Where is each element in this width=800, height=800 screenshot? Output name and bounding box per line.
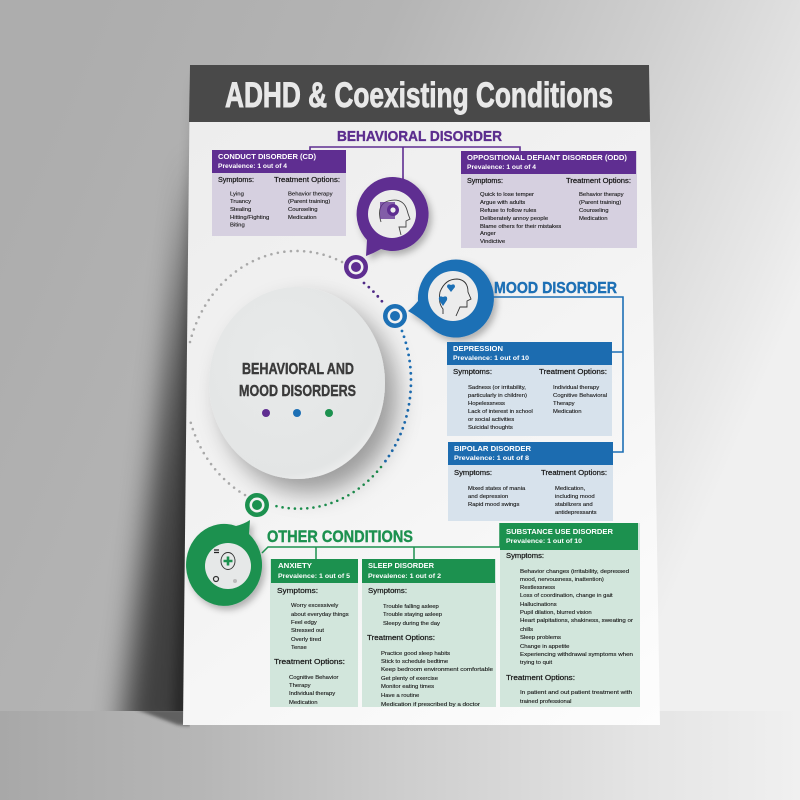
panel: anxiety: Symptoms: xyxy=(277,586,318,595)
panel: conduct disorder: Counseling xyxy=(288,207,317,213)
panel: substance use disorder: mood, nervousness, inattention) xyxy=(520,577,604,583)
panel: conduct disorder: (Parent training) xyxy=(288,199,330,205)
panel: substance use disorder: Pupil dilation, blurred vision xyxy=(520,610,592,616)
panel: bipolar disorder: Rapid mood swings xyxy=(468,502,519,508)
panel: sleep disorder: Monitor eating times xyxy=(381,684,434,690)
panel: bipolar disorder: Medication, xyxy=(555,486,585,492)
panel: anxiety: Individual therapy xyxy=(289,691,335,697)
connector: mood xyxy=(488,297,623,452)
panel: oppositional defiant disorder: Deliberately annoy people xyxy=(480,216,549,222)
panel: conduct disorder: Hitting/Fighting xyxy=(230,215,269,221)
panel: oppositional defiant disorder: Counseling xyxy=(579,208,608,214)
disc title: BEHAVIORAL AND xyxy=(242,361,354,378)
panel: anxiety: Feel edgy xyxy=(291,620,317,626)
panel: oppositional defiant disorder: (Parent training) xyxy=(579,200,621,206)
panel: sleep disorder: Treatment Options: xyxy=(367,633,435,642)
panel: anxiety xyxy=(270,559,358,707)
panel: substance use disorder: Change in appetite xyxy=(520,644,570,650)
node: blue xyxy=(383,304,407,328)
heading: behavioral disorder: BEHAVIORAL DISORDER xyxy=(337,129,502,145)
panel: sleep disorder: Keep bedroom environment comfortable xyxy=(381,667,494,673)
panel: anxiety: Stressed out xyxy=(291,628,324,634)
panel: substance use disorder: Restlessness xyxy=(520,585,555,591)
panel: depression: or social activities xyxy=(468,417,514,423)
panel: depression: DEPRESSION xyxy=(453,346,503,353)
panel: anxiety: Prevalence: 1 out of 5 xyxy=(278,573,351,580)
panel: substance use disorder: Hallucinations xyxy=(520,602,557,608)
panel: substance use disorder: Treatment Options: xyxy=(506,673,575,682)
panel: anxiety: Therapy xyxy=(289,683,311,689)
panel: anxiety: Medication xyxy=(289,700,318,706)
panel: oppositional defiant disorder: Behavior therapy xyxy=(579,192,624,198)
panel: substance use disorder: Loss of coordination, change in gait xyxy=(520,593,613,599)
panel: anxiety: Overly tired xyxy=(291,637,321,643)
panel: anxiety: ANXIETY xyxy=(278,563,312,570)
panel: substance use disorder: Prevalence: 1 out of 10 xyxy=(506,538,583,545)
panel: depression: Prevalence: 1 out of 10 xyxy=(453,355,530,362)
dotted ring: gray lower-left xyxy=(190,420,245,495)
panel: sleep disorder: Get plenty of exercise xyxy=(381,676,439,682)
panel: substance use disorder: Experiencing withdrawal symptoms when xyxy=(520,652,633,658)
panel: sleep disorder: Practice good sleep habits xyxy=(381,651,450,657)
dotted ring: purple segment xyxy=(364,283,384,304)
panel: bipolar disorder: including mood xyxy=(555,494,595,500)
panel: oppositional defiant disorder: Vindictive xyxy=(480,239,506,245)
panel: sleep disorder: Symptoms: xyxy=(368,586,407,595)
panel: bipolar disorder: Symptoms: xyxy=(454,468,492,477)
dotted ring: gray upper-left xyxy=(190,251,344,342)
panel: conduct disorder: Stealing xyxy=(230,207,251,213)
panel: oppositional defiant disorder: Prevalence: 1 out of 4 xyxy=(467,164,537,171)
node: purple xyxy=(344,255,368,279)
panel: oppositional defiant disorder: Symptoms: xyxy=(467,176,503,185)
panel: conduct disorder: Treatment Options: xyxy=(274,175,340,184)
disc title: MOOD DISORDERS xyxy=(239,383,356,400)
panel: substance use disorder: chills xyxy=(520,627,533,633)
panel: depression xyxy=(447,342,612,436)
panel: bipolar disorder: BIPOLAR DISORDER xyxy=(454,446,531,453)
poster sheet xyxy=(183,65,660,725)
floor xyxy=(0,711,800,800)
panel: depression: particularly in children) xyxy=(468,393,527,399)
heading: mood disorder: MOOD DISORDER xyxy=(494,280,617,297)
panel: sleep disorder: Trouble falling asleep xyxy=(383,604,440,610)
panel: substance use disorder: trying to quit xyxy=(520,660,552,666)
panel: depression: Suicidal thoughts xyxy=(468,425,513,431)
header band with title: ADHD & Coexisting Conditions xyxy=(225,76,613,115)
panel: anxiety: Worry excessively xyxy=(291,603,338,609)
panel: oppositional defiant disorder: Argue with adults xyxy=(480,200,525,206)
panel: depression: Symptoms: xyxy=(453,367,492,376)
panel: sleep disorder: Trouble staying asleep xyxy=(383,612,443,618)
panel: bipolar disorder: antidepressants xyxy=(555,510,597,516)
dotted ring: green segment xyxy=(272,467,381,509)
panel: sleep disorder: SLEEP DISORDER xyxy=(368,563,434,570)
panel: conduct disorder: Medication xyxy=(288,215,316,221)
panel: sleep disorder: Stick to schedule bedtime xyxy=(381,659,449,665)
panel: oppositional defiant disorder xyxy=(461,151,637,248)
panel: substance use disorder: Heart palpitations, shakiness, sweating or xyxy=(520,618,633,624)
panel: oppositional defiant disorder: Anger xyxy=(480,231,496,237)
panel: conduct disorder: CONDUCT DISORDER (CD) xyxy=(218,154,316,161)
panel: conduct disorder: Truancy xyxy=(230,199,251,205)
panel: oppositional defiant disorder: Medication xyxy=(579,216,608,222)
panel: bipolar disorder: Treatment Options: xyxy=(541,468,607,477)
panel: sleep disorder: Have a routine xyxy=(381,693,420,699)
panel: substance use disorder xyxy=(500,523,640,707)
central disc xyxy=(209,287,385,479)
panel: bipolar disorder: Mixed states of mania xyxy=(468,486,526,492)
panel: anxiety: Treatment Options: xyxy=(274,657,345,666)
disc title xyxy=(239,361,356,400)
panel: substance use disorder: SUBSTANCE USE DISORDER xyxy=(506,529,613,536)
panel: sleep disorder: Prevalence: 1 out of 2 xyxy=(368,573,442,580)
panel: conduct disorder: Behavior therapy xyxy=(288,192,333,198)
icon: purple head with gear xyxy=(357,177,429,256)
panel: oppositional defiant disorder: Blame others for their mistakes xyxy=(480,224,561,230)
heading: other conditions: OTHER CONDITIONS xyxy=(267,527,413,546)
connector: behavioral xyxy=(310,147,520,180)
panel: oppositional defiant disorder: Quick to lose temper xyxy=(480,192,534,198)
panel: anxiety: Tense xyxy=(291,645,307,651)
panel: depression: Treatment Options: xyxy=(539,367,607,376)
panel: bipolar disorder: Prevalence: 1 out of 8 xyxy=(454,455,530,462)
icon: blue head with hearts xyxy=(408,260,494,338)
panel: substance use disorder: Behavior changes (irritability, depressed xyxy=(520,569,629,575)
panel: oppositional defiant disorder: Treatment Options: xyxy=(566,176,631,185)
panel: oppositional defiant disorder: Refuse to follow rules xyxy=(480,208,536,214)
panel: conduct disorder: Symptoms: xyxy=(218,175,254,184)
dotted ring: blue segment xyxy=(384,331,411,463)
panel: depression: Sadness (or irritability, xyxy=(468,385,526,391)
panel: sleep disorder xyxy=(362,559,496,708)
connector: other conditions xyxy=(262,523,500,559)
panel: conduct disorder: Lying xyxy=(230,192,244,198)
icon: green dial with plus xyxy=(186,520,262,606)
panel: depression: Medication xyxy=(553,409,582,415)
panel: depression: Lack of interest in school xyxy=(468,409,533,415)
panel: sleep disorder: Medication if prescribed by a doctor xyxy=(381,702,480,708)
panel: bipolar disorder xyxy=(448,442,613,521)
panel: depression: Cognitive Behavioral xyxy=(553,393,607,399)
panel: depression: Therapy xyxy=(553,401,575,407)
panel: substance use disorder: Sleep problems xyxy=(520,635,561,641)
panel: conduct disorder: Biting xyxy=(230,222,245,228)
panel: anxiety: about everyday things xyxy=(291,612,349,618)
panel: depression: Individual therapy xyxy=(553,385,599,391)
panel: conduct disorder: Prevalence: 1 out of 4 xyxy=(218,163,288,170)
panel: substance use disorder: trained professional xyxy=(520,699,571,705)
poster shadow on wall xyxy=(120,70,195,740)
panel: substance use disorder: In patient and out patient treatment with xyxy=(520,690,632,696)
panel: sleep disorder: Sleepy during the day xyxy=(383,621,440,627)
poster xyxy=(183,65,660,725)
panel: bipolar disorder: stabilizers and xyxy=(555,502,593,508)
panel: bipolar disorder: and depression xyxy=(468,494,508,500)
panel: conduct disorder xyxy=(212,150,346,236)
panel: substance use disorder: Symptoms: xyxy=(506,551,544,560)
panel: anxiety: Cognitive Behavior xyxy=(289,675,338,681)
panel: oppositional defiant disorder: OPPOSITIONAL DEFIANT DISORDER (ODD) xyxy=(467,155,627,162)
header band with title xyxy=(189,65,650,122)
poster shadow on floor xyxy=(135,709,190,726)
node: green xyxy=(245,493,269,517)
panel: depression: Hopelessness xyxy=(468,401,505,407)
